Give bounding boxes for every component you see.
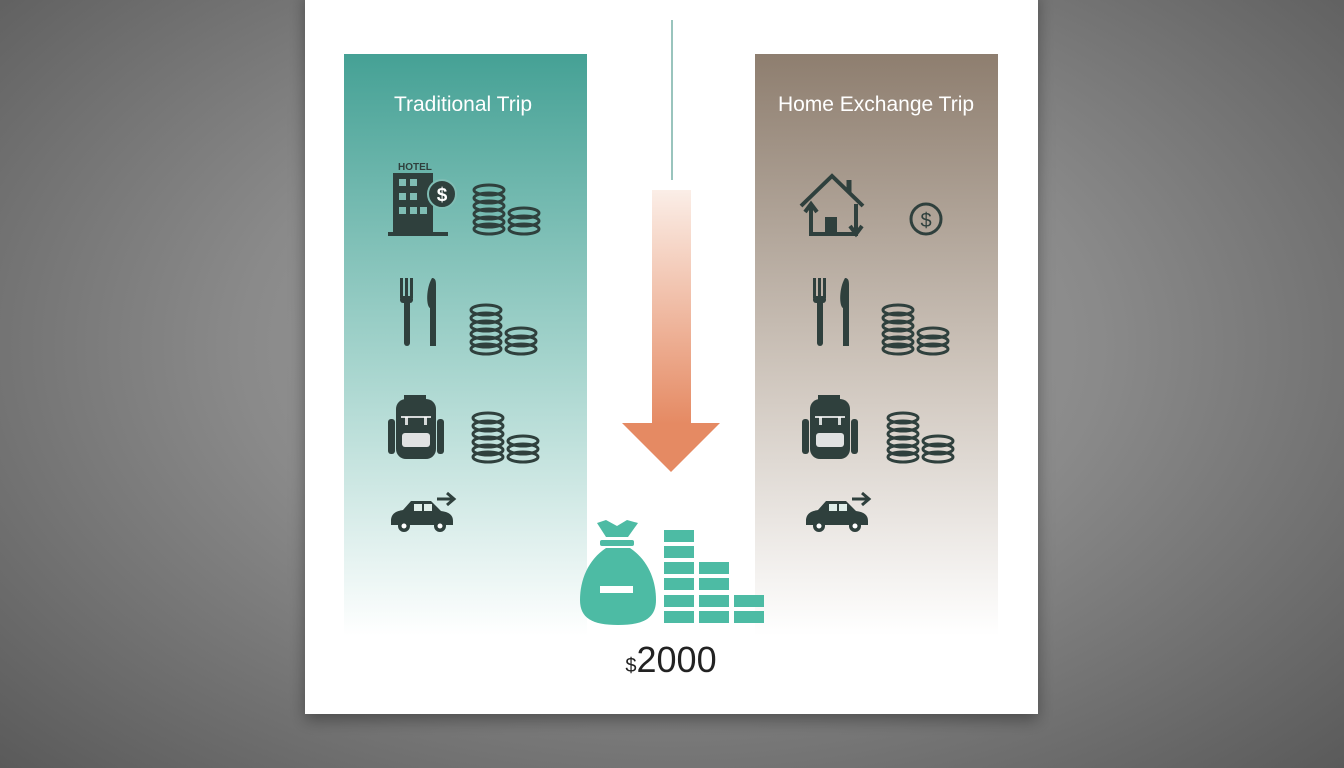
icon: backpack: [802, 395, 858, 459]
icon: hotel: [388, 162, 456, 236]
icon: hotel: $: [437, 185, 448, 206]
arrow: savings down: [622, 190, 720, 472]
card: [305, 0, 1038, 714]
icon: money bag and stacks: [580, 520, 764, 625]
coins: activities: [473, 413, 538, 462]
icon: dollar coin: $: [920, 210, 932, 232]
icon: dining: [400, 278, 436, 346]
panel: traditional trip: [344, 54, 587, 636]
savings amount: $2000: [625, 639, 717, 680]
coins: dining: [471, 305, 536, 354]
icon: dining: [813, 278, 849, 346]
icon: car: [391, 493, 454, 532]
coins: dining: [883, 305, 948, 354]
panel: home exchange trip: [755, 54, 998, 636]
icon: car: [806, 493, 869, 532]
heading: home exchange trip: Home Exchange Trip: [778, 93, 974, 116]
heading: traditional trip: Traditional Trip: [394, 93, 532, 116]
coins: activities: [888, 413, 953, 462]
icon: hotel: HOTEL: [398, 162, 432, 173]
coins: hotel: [474, 185, 539, 234]
icon: house exchange: [801, 176, 863, 234]
icon: backpack: [388, 395, 444, 459]
icon: dollar coin: [911, 204, 941, 234]
divider line top: [671, 20, 673, 180]
